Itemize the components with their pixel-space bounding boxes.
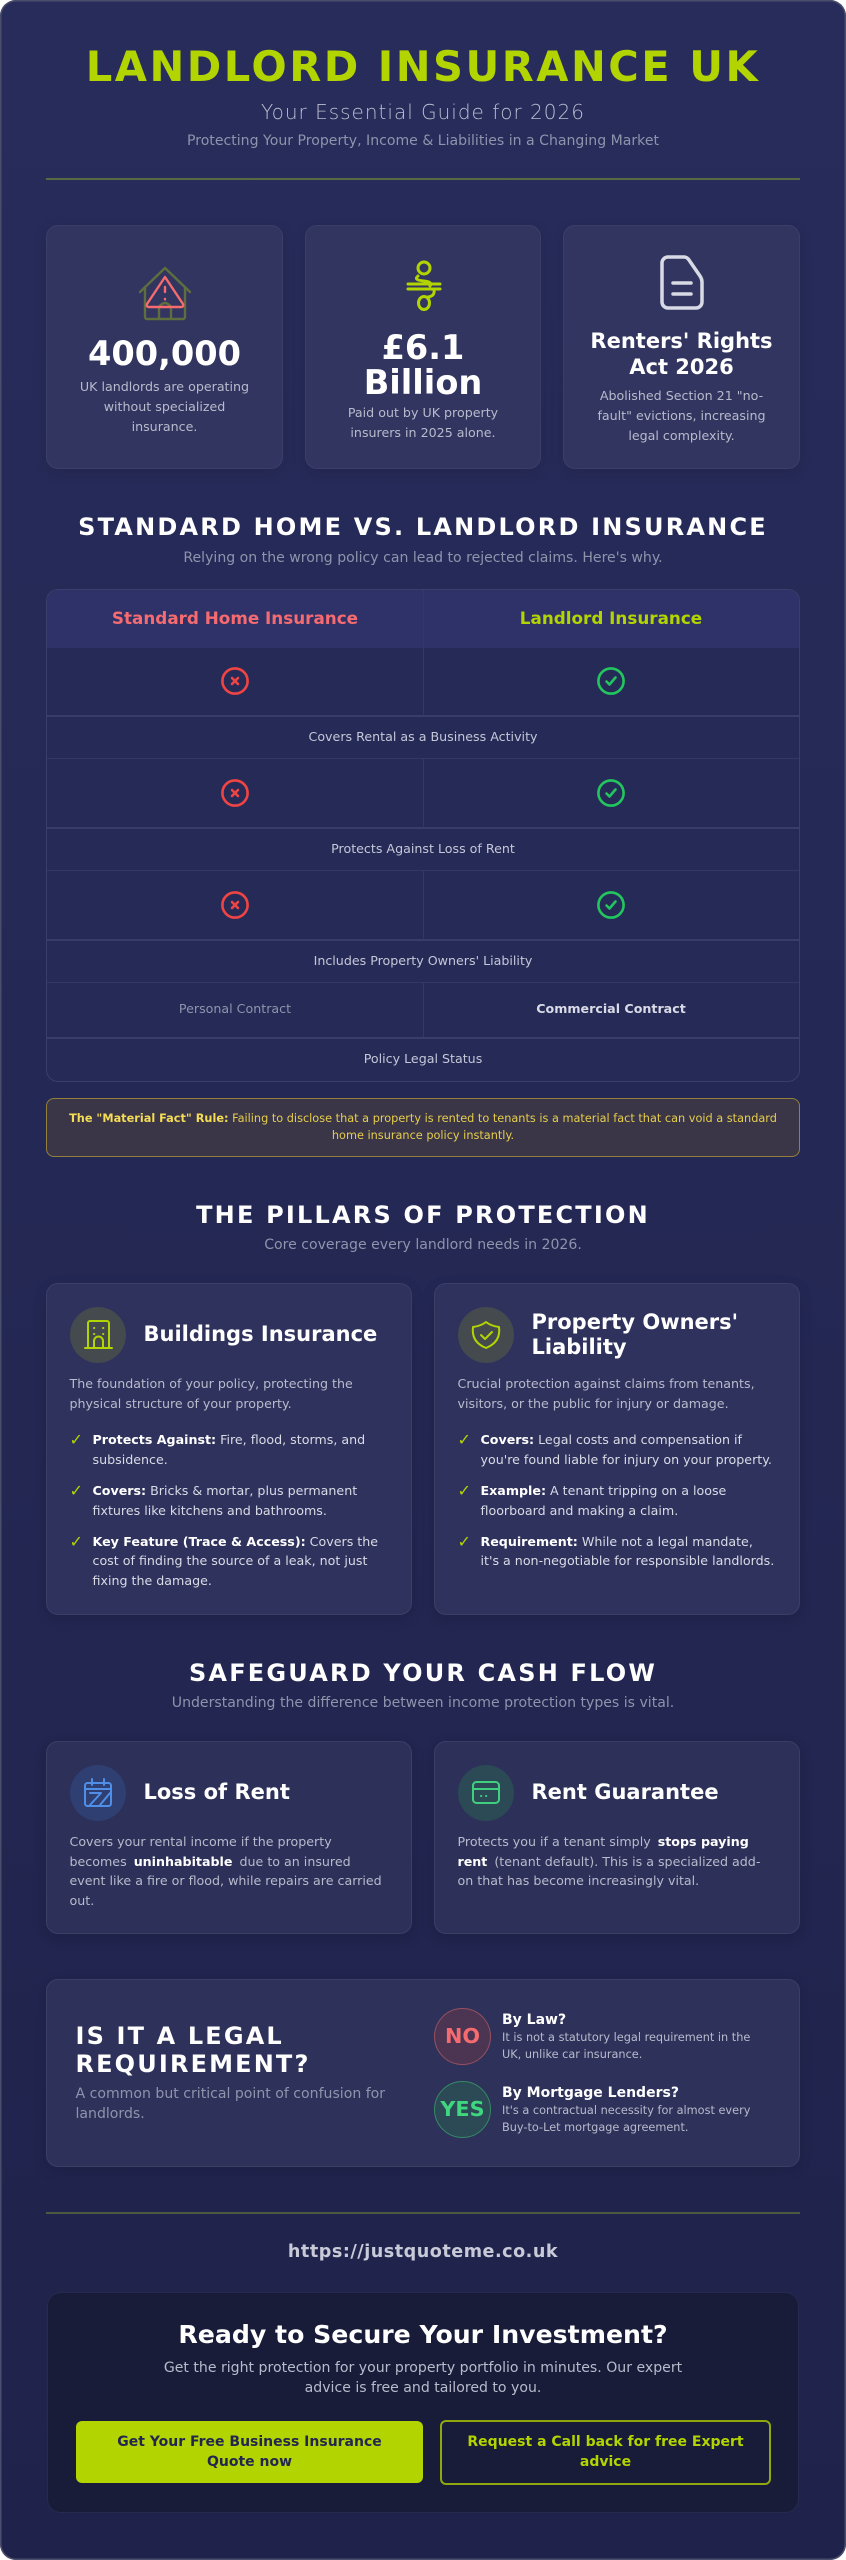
panel: legal requirement bbox=[46, 1979, 800, 2167]
table header: Landlord Insurance bbox=[520, 608, 702, 628]
title: LANDLORD INSURANCE UK bbox=[86, 42, 760, 91]
comparison table bbox=[46, 589, 800, 1082]
row 1 cross icon bbox=[221, 667, 249, 695]
bullet list: Covers: Legal costs and compensation if bbox=[480, 1432, 742, 1447]
bullet list: Covers: Bricks & mortar, plus permanent bbox=[92, 1483, 357, 1498]
by law text: UK, unlike car insurance. bbox=[502, 2048, 642, 2061]
stat description: without specialized bbox=[104, 399, 225, 414]
legal subtext bbox=[76, 2086, 385, 2122]
section heading: comparison: STANDARD HOME VS. LANDLORD INSURANCE bbox=[78, 513, 768, 541]
icon: pound chain bbox=[406, 260, 442, 311]
bullet list: ✓ bbox=[458, 1481, 471, 1500]
bullet list: ✓ bbox=[458, 1430, 471, 1449]
card description: out. bbox=[70, 1893, 94, 1908]
button: quote bbox=[76, 2421, 423, 2483]
callout: material fact: The "Material Fact" Rule: Failing to disclose that a property is rented to tenants is a material fact that can void a standard bbox=[69, 1112, 777, 1125]
legal heading: IS IT A LEGAL bbox=[76, 2022, 284, 2050]
icon: document bbox=[660, 255, 704, 310]
section heading: cash flow bbox=[172, 1659, 674, 1711]
badge: yes bbox=[434, 2081, 491, 2138]
stat description: UK landlords are operating bbox=[80, 379, 249, 394]
bullet list bbox=[458, 1430, 774, 1568]
bullet list: it's a non-negotiable for responsible landlords. bbox=[480, 1553, 774, 1568]
bullet list: you're found liable for injury on your property. bbox=[480, 1452, 772, 1467]
stat description bbox=[80, 379, 249, 434]
legal heading bbox=[76, 2022, 311, 2078]
row 3 check icon bbox=[597, 891, 625, 919]
panel: stat renters rights bbox=[563, 225, 800, 469]
panel: rent guarantee bbox=[434, 1741, 800, 1934]
stat description: Abolished Section 21 "no- bbox=[600, 388, 763, 403]
section heading: pillars: Core coverage every landlord needs in 2026. bbox=[264, 1237, 582, 1253]
card description: Crucial protection against claims from tenants, bbox=[458, 1376, 755, 1391]
stat description: legal complexity. bbox=[628, 428, 735, 443]
card title: Property Owners' bbox=[532, 1310, 738, 1334]
mortgage text: Buy-to-Let mortgage agreement. bbox=[502, 2121, 688, 2134]
row 4 personal contract: Personal Contract bbox=[179, 1001, 291, 1016]
bullet list: Protects Against: Fire, flood, storms, and bbox=[92, 1432, 365, 1447]
card description: Covers your rental income if the property bbox=[70, 1834, 332, 1849]
table header: Standard Home Insurance bbox=[112, 608, 358, 628]
icon: calendar bbox=[70, 1765, 126, 1821]
row 2 label: Protects Against Loss of Rent bbox=[331, 841, 515, 856]
icon: building bbox=[70, 1307, 126, 1363]
website url: https://justquoteme.co.uk bbox=[288, 2242, 558, 2262]
card description bbox=[458, 1376, 755, 1411]
panel: stat 400,000 bbox=[46, 225, 283, 469]
bullet list: Requirement: While not a legal mandate, bbox=[480, 1534, 753, 1549]
button: quote: Get Your Free Business Insurance bbox=[117, 2434, 382, 2450]
bullet list: fixtures like kitchens and bathrooms. bbox=[92, 1503, 327, 1518]
card description: on that has become increasingly vital. bbox=[458, 1873, 699, 1888]
button: call back bbox=[440, 2420, 771, 2485]
by law text bbox=[502, 2012, 750, 2061]
bullet list: cost of finding the source of a leak, not just bbox=[92, 1553, 367, 1568]
card description: physical structure of your property. bbox=[70, 1396, 292, 1411]
badge: no: NO bbox=[445, 2024, 480, 2048]
card description bbox=[69, 1376, 353, 1411]
button: quote: Quote now bbox=[207, 2454, 292, 2470]
stat heading: Renters' Rights bbox=[590, 329, 773, 353]
card description: rent (tenant default). This is a specialized add- bbox=[458, 1854, 760, 1869]
cta heading: Ready to Secure Your Investment? bbox=[178, 2320, 668, 2349]
badge: no bbox=[434, 2008, 491, 2065]
by law text: By Law? bbox=[502, 2012, 566, 2028]
bullet list: floorboard and making a claim. bbox=[480, 1503, 678, 1518]
bullet list: ✓ bbox=[70, 1532, 83, 1551]
row 2 check icon bbox=[597, 779, 625, 807]
stat value: £6.1 bbox=[382, 328, 464, 367]
row 2 cross icon bbox=[221, 779, 249, 807]
row 4 label: Policy Legal Status bbox=[364, 1051, 482, 1066]
panel: stat 6.1 billion bbox=[305, 225, 541, 469]
panel: call to action bbox=[47, 2292, 799, 2513]
section heading: pillars bbox=[196, 1201, 650, 1253]
card description: visitors, or the public for injury or damage. bbox=[458, 1396, 729, 1411]
section heading: cash flow: Understanding the difference between income protection types is vital. bbox=[172, 1695, 674, 1711]
section heading: pillars: THE PILLARS OF PROTECTION bbox=[196, 1201, 650, 1229]
stat description bbox=[348, 405, 498, 440]
callout: material fact bbox=[46, 1098, 800, 1157]
card title: Buildings Insurance bbox=[144, 1322, 377, 1346]
table header bbox=[47, 590, 799, 648]
section heading: cash flow: SAFEGUARD YOUR CASH FLOW bbox=[189, 1659, 657, 1687]
legal subtext: A common but critical point of confusion for bbox=[76, 2086, 385, 2102]
mortgage text: It's a contractual necessity for almost every bbox=[502, 2104, 750, 2117]
cta text: Get the right protection for your property portfolio in minutes. Our expert bbox=[164, 2360, 682, 2376]
section heading: comparison: Relying on the wrong policy can lead to rejected claims. Here's why. bbox=[183, 550, 663, 566]
bullet list: Key Feature (Trace & Access): Covers the bbox=[92, 1534, 378, 1549]
panel: buildings insurance bbox=[46, 1283, 412, 1615]
row 4 commercial contract: Commercial Contract bbox=[536, 1001, 686, 1016]
card title: Rent Guarantee bbox=[532, 1780, 719, 1804]
by law text: It is not a statutory legal requirement in the bbox=[502, 2031, 750, 2044]
badge: yes: YES bbox=[440, 2097, 485, 2121]
card description: The foundation of your policy, protecting the bbox=[70, 1376, 353, 1391]
mortgage text: By Mortgage Lenders? bbox=[502, 2085, 679, 2101]
stat description: Paid out by UK property bbox=[348, 405, 498, 420]
card title: Liability bbox=[532, 1335, 627, 1359]
bullet list: fixing the damage. bbox=[92, 1573, 212, 1588]
card description: Protects you if a tenant simply stops paying bbox=[458, 1834, 749, 1849]
stat description bbox=[597, 388, 766, 443]
stat description: insurers in 2025 alone. bbox=[350, 425, 496, 440]
cta text bbox=[164, 2360, 682, 2396]
row 3 cross icon bbox=[221, 891, 249, 919]
bullet list: ✓ bbox=[458, 1532, 471, 1551]
icon: card bbox=[458, 1765, 514, 1821]
card description bbox=[458, 1834, 760, 1888]
bullet list: ✓ bbox=[70, 1430, 83, 1449]
header bbox=[86, 42, 760, 149]
row 1 check icon bbox=[597, 667, 625, 695]
row 1 label: Covers Rental as a Business Activity bbox=[308, 729, 538, 744]
section heading: comparison bbox=[78, 513, 768, 566]
legal heading: REQUIREMENT? bbox=[76, 2050, 311, 2078]
button: call back: advice bbox=[580, 2454, 631, 2470]
panel: loss of rent bbox=[46, 1741, 412, 1934]
card description: event like a fire or flood, while repairs are carried bbox=[70, 1873, 382, 1888]
panel: stat 6.1 billion: Billion bbox=[364, 363, 482, 402]
button: call back: Request a Call back for free Expert bbox=[467, 2434, 744, 2450]
icon: house with warning bbox=[138, 266, 192, 320]
card description bbox=[70, 1834, 382, 1908]
bullet list: Example: A tenant tripping on a loose bbox=[480, 1483, 726, 1498]
stat value: 400,000 bbox=[88, 334, 241, 373]
stat description: fault" evictions, increasing bbox=[597, 408, 766, 423]
panel: stat renters rights: Act 2026 bbox=[629, 355, 734, 379]
card title: Loss of Rent bbox=[144, 1780, 290, 1804]
legal subtext: landlords. bbox=[76, 2106, 145, 2122]
card title bbox=[532, 1310, 738, 1359]
bullet list: subsidence. bbox=[92, 1452, 168, 1467]
mortgage text bbox=[502, 2085, 750, 2134]
card description: becomes uninhabitable due to an insured bbox=[70, 1854, 351, 1869]
bullet list: ✓ bbox=[70, 1481, 83, 1500]
row 3 label: Includes Property Owners' Liability bbox=[314, 953, 532, 968]
callout: material fact: home insurance policy instantly. bbox=[332, 1129, 514, 1142]
subtitle: Your Essential Guide for 2026 bbox=[261, 100, 585, 124]
panel: property owners liability bbox=[434, 1283, 800, 1615]
cta text: advice is free and tailored to you. bbox=[305, 2380, 541, 2396]
tagline: Protecting Your Property, Income & Liabilities in a Changing Market bbox=[187, 133, 659, 149]
bullet list bbox=[70, 1430, 378, 1588]
icon: shield bbox=[458, 1307, 514, 1363]
stat description: insurance. bbox=[132, 419, 197, 434]
